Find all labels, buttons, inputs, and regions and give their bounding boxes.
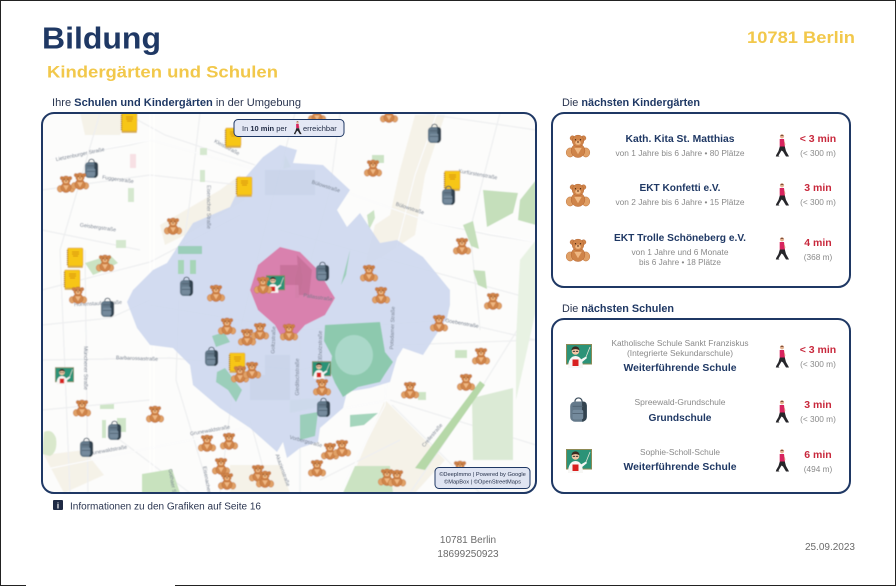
street labels: Eisenacher Str. <box>201 466 213 502</box>
street labels: Fuggerstraße <box>102 175 134 185</box>
row: EKT Trolle Schöneberg: (368 m) <box>804 252 833 262</box>
row: Katholische Schule: < 3 min <box>800 344 836 356</box>
kindergarten heading: Die nächsten Kindergärten <box>562 97 700 109</box>
row: Sophie-Scholl-Schule: Sophie-Scholl-Schule <box>640 448 720 457</box>
row: EKT Trolle Schöneberg: bis 6 Jahre • 18 Plätze <box>639 258 721 267</box>
row: Kath. Kita St. Matthias <box>566 133 836 158</box>
badge: walking time <box>234 120 344 136</box>
isochrone: 3 min walk <box>250 247 335 340</box>
map markers: schools <box>55 113 460 457</box>
row: Katholische Schule <box>566 339 836 374</box>
street labels: Lietzenburger Straße <box>55 147 105 163</box>
map heading: Ihre Schulen und Kindergärten in der Umgebung <box>52 97 301 109</box>
panel: map <box>42 106 536 502</box>
row: EKT Trolle Schöneberg: von 1 Jahre und 6 Monate <box>632 248 728 257</box>
info note: Informationen zu den Grafiken auf Seite 16 <box>70 502 261 512</box>
street labels: Elßholzstraße <box>318 331 324 363</box>
street labels: Akazienstraße <box>273 453 291 487</box>
row: Sophie-Scholl-Schule: (494 m) <box>804 464 833 474</box>
street labels: Potsdamer Straße <box>389 306 397 350</box>
map credit <box>435 468 530 488</box>
panel: schools <box>552 319 850 493</box>
street labels: Goebenstraße <box>445 318 479 330</box>
row: EKT Konfetti: (< 300 m) <box>800 197 836 207</box>
street labels: Vorbergstraße <box>289 435 323 449</box>
row: EKT Konfetti: von 2 Jahre bis 6 Jahre • 15 Plätze <box>616 198 744 207</box>
street labels: Barbarossastraße <box>116 355 158 363</box>
row: Spreewald-Grundschule <box>570 398 836 424</box>
beige areas <box>44 113 445 493</box>
footer: date: 25.09.2023 <box>805 542 855 553</box>
footer: address: 18699250923 <box>437 549 499 560</box>
row: EKT Konfetti <box>566 182 836 207</box>
row: Katholische Schule: Weiterführende Schule <box>624 363 737 374</box>
street labels <box>55 139 498 502</box>
street labels: Gothaer Str. <box>167 469 177 498</box>
row: Spreewald-Grundschule: Spreewald-Grundschule <box>634 398 726 407</box>
row: Kath. Kita St. Matthias: Kath. Kita St. Matthias <box>626 134 735 145</box>
row: EKT Konfetti: EKT Konfetti e.V. <box>640 183 721 194</box>
footer: address: 10781 Berlin <box>440 535 496 546</box>
row: Katholische Schule: Katholische Schule Sankt Franziskus <box>612 339 749 348</box>
row: EKT Trolle Schöneberg: EKT Trolle Schöneberg e.V. <box>614 233 746 244</box>
address heading: 10781 Berlin <box>747 29 855 47</box>
info note: i <box>57 502 59 510</box>
park inside isochrone <box>324 322 393 397</box>
map credit: ©MapBox | ©OpenStreetMaps <box>444 478 521 486</box>
row: EKT Trolle Schöneberg <box>566 233 833 267</box>
row: Kath. Kita St. Matthias: (< 300 m) <box>800 148 836 158</box>
subtitle: Kindergärten und Schulen <box>47 64 278 82</box>
street labels: Hohenstaufenstraße <box>74 300 122 308</box>
street labels: Kleiststraße <box>213 139 240 157</box>
isochrone: 10 min walk <box>127 145 450 458</box>
title: Bildung <box>42 20 161 56</box>
panel: kindergartens <box>552 113 850 287</box>
row: Katholische Schule: (< 300 m) <box>800 359 836 369</box>
street labels: Bülowstraße <box>395 202 425 216</box>
row: Spreewald-Grundschule: 3 min <box>804 399 832 411</box>
roads <box>42 113 536 493</box>
street labels: Kurfürstenstraße <box>458 169 498 181</box>
street labels: Grunewaldstraße <box>87 444 128 457</box>
row: Spreewald-Grundschule: (< 300 m) <box>800 414 836 424</box>
row: Sophie-Scholl-Schule: Weiterführende Schule <box>624 462 737 473</box>
street labels: Goltzstraße <box>271 326 277 354</box>
street labels: Eisenacher Straße <box>205 185 211 229</box>
schools heading: Die nächsten Schulen <box>562 303 674 315</box>
row: Sophie-Scholl-Schule <box>566 448 833 474</box>
row: EKT Konfetti: 3 min <box>804 182 832 194</box>
street labels: Bülowstraße <box>311 180 341 194</box>
footer: address <box>437 535 499 560</box>
row: Katholische Schule: (Integrierte Sekundarschule) <box>627 349 733 358</box>
map credit: ©DeepImmo | Powered by Google <box>439 471 526 478</box>
row: EKT Trolle Schöneberg: 4 min <box>804 237 832 249</box>
street labels: Grunewaldstraße <box>190 424 231 437</box>
street labels: Münchener Straße <box>82 346 88 390</box>
row: Sophie-Scholl-Schule: 6 min <box>804 449 832 461</box>
row: Kath. Kita St. Matthias: von 1 Jahre bis 6 Jahre • 80 Plätze <box>616 149 744 158</box>
green areas <box>463 180 536 289</box>
map markers: kindergartens <box>57 106 502 490</box>
street labels: Gleditschstraße <box>295 358 301 396</box>
row: Kath. Kita St. Matthias: < 3 min <box>800 133 836 145</box>
street labels: Pallasstraße <box>303 293 333 303</box>
street labels: Geisbergstraße <box>79 222 116 234</box>
badge: walking time: erreichbar <box>303 124 337 133</box>
badge: walking time: In 10 min per <box>242 124 288 133</box>
row: Spreewald-Grundschule: Grundschule <box>648 413 712 424</box>
street labels: Crellestraße <box>421 423 444 449</box>
